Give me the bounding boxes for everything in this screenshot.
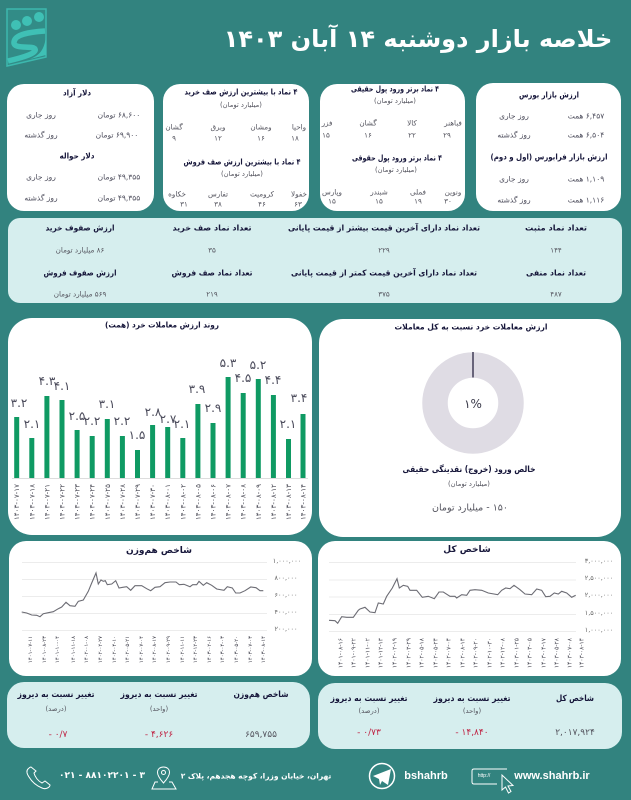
x axis labels (28, 636, 267, 663)
panel: top queue symbols: واحیا (292, 122, 306, 132)
title: خلاصه بازار دوشنبه ۱۴ آبان ۱۴۰۳ (224, 24, 612, 53)
bar chart: ۱۴۰۳-۰۷-۲۸ (118, 484, 127, 520)
panel: equal weight index summary (7, 682, 310, 748)
y axis labels: ۴۰۰,۰۰۰ (274, 608, 298, 616)
panel: symbol counts table: ارزش صفوف خرید (46, 224, 115, 234)
panel: equal weight index summary: (درصد) (46, 705, 67, 713)
bar chart: ۳.۹ (189, 382, 205, 396)
bar chart: ۱۴۰۳-۰۷-۲۳ (73, 484, 82, 520)
panel: top money inflow symbols: فملی (410, 188, 426, 196)
panel: top queue symbols: ۱۶ (257, 134, 265, 142)
bar chart: ۴.۱ (54, 379, 70, 393)
chart title: شاخص هم‌وزن (126, 546, 192, 556)
panel: total index summary: (درصد) (359, 707, 380, 715)
panel: symbol counts table: ۳۷۵ (378, 290, 390, 298)
bar chart: ۱۴۰۳-۰۸-۰۹ (254, 484, 263, 520)
x axis labels: ۱۴۰۳-۰۷-۰۳ (248, 636, 254, 663)
panel: total index summary: (واحد) (463, 707, 481, 715)
y axis labels: ۱,۰۰۰,۰۰۰ (273, 557, 301, 565)
x axis labels: ۱۴۰۳-۰۱-۲۵ (514, 638, 520, 668)
panel: dollar rates: ۶۹,۹۰۰ تومان (96, 130, 138, 140)
bar chart: ۱۴۰۳-۰۸-۰۲ (178, 484, 187, 520)
panel: equal weight index summary: تغییر نسبت به دیروز (120, 690, 198, 700)
panel: top money inflow symbols: ۲۲ (408, 130, 416, 140)
x axis labels: ۱۴۰۲-۰۸-۱۴ (460, 638, 466, 668)
panel: symbol counts table: تعداد نماد صف فروش (172, 268, 252, 278)
x axis labels: ۱۴۰۲-۰۱-۰۸ (84, 636, 90, 663)
panel: top queue symbols: ۹ (172, 134, 176, 142)
bar chart: ۳.۴ (291, 391, 307, 405)
panel: symbol counts table: ۵۶۹ میلیارد تومان (54, 290, 106, 298)
panel: top queue symbols: تفارس (208, 190, 228, 198)
panel: top queue symbols: ۳۱ (180, 200, 188, 208)
y axis labels: ۸۰۰,۰۰۰ (274, 574, 298, 582)
panel: top queue symbols: ۴۶ (258, 200, 266, 208)
panel: top queue symbols: ۱۸ (291, 134, 299, 142)
y axis labels: ۶۰۰,۰۰۰ (274, 591, 298, 599)
x axis labels: ۱۴۰۳-۰۷-۰۸ (566, 637, 574, 668)
panel: top money inflow symbols: کالا (407, 118, 417, 128)
panel: top queue symbols: ۴ نماد با بیشترین ارزش صف خرید (184, 88, 298, 98)
bar chart: ۲.۸ (145, 405, 162, 419)
panel: total index summary (318, 683, 622, 749)
panel: symbol counts table: تعداد نماد منفی (526, 268, 586, 278)
panel: total index summary: - ۱۴,۸۴۰ (455, 728, 489, 738)
bar chart: ۱۴۰۳-۰۸-۰۸ (239, 484, 248, 520)
chart title: شاخص کل (443, 545, 491, 555)
panel: symbol counts table: ۱۴۴ (550, 246, 562, 254)
liquidity net flow: خالص ورود (خروج) نقدینگی حقیقی (402, 464, 536, 475)
panel: top queue symbols: ۶۳ (294, 200, 302, 208)
y axis labels: ۲۰۰,۰۰۰ (274, 625, 298, 633)
x axis labels: ۱۴۰۲-۱۰-۳۰ (486, 638, 494, 668)
y axis labels (273, 557, 301, 633)
x axis labels: ۱۴۰۱-۱۱-۰۲ (364, 638, 372, 668)
icon: map pin (152, 767, 176, 789)
x axis labels: ۱۴۰۲-۱۲-۰۸ (500, 637, 506, 668)
bar chart: ۱۴۰۳-۰۷-۲۹ (133, 484, 142, 520)
x axis labels: ۱۴۰۳-۰۳-۰۵ (526, 638, 534, 668)
panel: market value: ۶,۵۰۴ همت (568, 130, 604, 140)
x axis labels: ۱۴۰۲-۱۲-۲۳ (193, 636, 199, 663)
y axis labels: ۱,۵۰۰,۰۰۰ (585, 609, 613, 617)
line chart: equal weight index (22, 573, 263, 617)
bar chart: ۱۴۰۳-۰۸-۱۴ (298, 484, 308, 520)
panel: market value: ارزش بازار فرابورس (اول و دوم) (490, 152, 608, 162)
bar chart: ۲.۱ (24, 417, 40, 431)
panel: top queue symbols: کرومیت (250, 190, 275, 198)
donut chart: ۱% (464, 397, 482, 411)
panel: dollar rates: روز گذشته (24, 130, 58, 140)
x axis labels: ۱۴۰۲-۰۴-۱۰ (112, 636, 118, 663)
panel: top money inflow symbols: ۱۶ (364, 130, 372, 140)
x axis labels: ۱۴۰۱-۰۸-۲۳ (42, 636, 48, 663)
panel: top money inflow symbols: ۴ نماد برتر ورود پول حقوقی (352, 154, 442, 162)
panel: symbol counts table: تعداد نماد مثبت (525, 224, 587, 232)
panel: symbol counts table: ۲۱۹ (206, 290, 218, 298)
x axis labels: ۱۴۰۱-۰۹-۲۲ (350, 638, 358, 668)
bar chart: ۱۴۰۳-۰۸-۰۷ (224, 484, 233, 520)
x axis labels: ۱۴۰۳-۰۲-۱۶ (207, 636, 213, 663)
panel: symbol counts table: تعداد نماد دارای آخرین قیمت بیشتر از قیمت پایانی (288, 222, 480, 232)
x axis labels: ۱۴۰۲-۰۲-۱۹ (392, 638, 398, 668)
bar chart: ۱۴۰۳-۰۷-۲۱ (42, 484, 51, 520)
panel: top money inflow symbols: شبندر (369, 188, 388, 196)
panel: total index summary: - ۰/۷۳ (357, 728, 381, 738)
bar chart: ۱۴۰۳-۰۸-۰۵ (193, 484, 202, 520)
panel: top money inflow symbols: ۱۵ (322, 130, 330, 140)
panel: equal weight index chart (9, 541, 312, 676)
y axis labels: ۲,۵۰۰,۰۰۰ (585, 574, 613, 582)
panel: top money inflow symbols: ۴ نماد برتر ورود پول حقیقی (351, 84, 439, 94)
bar chart: ۲.۱ (174, 417, 190, 431)
panel: dollar rates: روز جاری (26, 172, 56, 182)
telegram handle: bshahrb (404, 770, 448, 782)
bar chart: ۱۴۰۳-۰۸-۰۶ (208, 484, 218, 520)
panel: symbol counts table: ۲۲۹ (378, 246, 390, 254)
panel: equal weight index summary: تغییر نسبت به دیروز (17, 690, 94, 700)
panel: dollar rates: دلار آزاد (63, 88, 91, 98)
bar chart: ۲.۷ (160, 412, 177, 426)
panel: dollar rates: ۴۹,۳۵۵ تومان (98, 194, 140, 202)
panel: total index summary: شاخص کل (556, 694, 594, 704)
panel: equal weight index summary: شاخص هم‌وزن (234, 690, 288, 700)
panel: market value: ارزش بازار بورس (519, 90, 579, 100)
bar chart: ۵.۲ (250, 358, 266, 372)
bar chart: ۳.۲ (11, 396, 27, 410)
panel: total index summary: تغییر نسبت به دیروز (330, 694, 408, 704)
panel: dollar rates: ۴۹,۳۵۵ تومان (98, 172, 140, 182)
panel: dollar rates: دلار حواله (60, 152, 94, 160)
panel: top money inflow symbols: فزر (321, 118, 332, 128)
panel: market value: ۶,۴۵۷ همت (568, 112, 604, 120)
panel: top money inflow symbols: فباهنر (443, 118, 462, 128)
liquidity net flow: (میلیارد تومان) (448, 480, 490, 488)
panel: top queue symbols: (میلیارد تومان) (221, 170, 263, 178)
panel: market value: روز جاری (499, 174, 529, 184)
panel: top money inflow symbols: ونوین (445, 188, 461, 196)
panel: top queue symbols: ۴ نماد با بیشترین ارزش صف فروش (184, 158, 301, 168)
x axis labels: ۱۴۰۲-۰۲-۲۷ (98, 636, 104, 663)
panel: top queue symbols: ۳۸ (214, 200, 222, 208)
x axis labels: ۱۴۰۳-۰۵-۲۸ (554, 637, 560, 668)
bar chart: ۴.۴ (265, 373, 281, 387)
bar chart: ۲.۱ (280, 417, 296, 431)
x axis labels: ۱۴۰۳-۰۴-۰۳ (220, 636, 226, 663)
panel: equal weight index summary: (واحد) (150, 705, 168, 713)
panel: top queue symbols: (میلیارد تومان) (220, 101, 262, 109)
panel: top queue symbols: خفولا (291, 190, 307, 198)
x axis labels: ۱۴۰۲-۰۹-۲۰ (472, 638, 480, 668)
panel: symbol counts table: ۳۵ (208, 246, 216, 254)
bar chart: ۵.۳ (220, 356, 237, 370)
bar chart: ۲.۲ (84, 414, 100, 428)
y axis labels: ۳,۰۰۰,۰۰۰ (585, 557, 613, 565)
bar chart: ۱۴۰۳-۰۸-۱۳ (284, 484, 293, 520)
panel: top queue symbols: ومشان (250, 122, 272, 132)
panel: total index summary: ۲,۰۱۷,۹۲۴ (555, 728, 595, 738)
bar chart: ۱۴۰۳-۰۷-۲۴ (88, 484, 97, 520)
donut chart (435, 352, 511, 441)
x axis labels: ۱۴۰۲-۰۷-۰۴ (446, 638, 452, 668)
bar chart: ۲.۲ (114, 414, 130, 428)
bar chart: ۴.۵ (235, 371, 251, 385)
x axis labels: ۱۴۰۲-۱۱-۱۱ (180, 636, 186, 663)
x axis labels: ۱۴۰۱-۱۱-۱۸ (71, 636, 77, 663)
icon: telegram (370, 764, 394, 788)
bar chart: ۴.۳ (39, 374, 56, 388)
x axis labels: ۱۴۰۱-۰۷-۱۱ (28, 636, 34, 663)
x axis labels: ۱۴۰۳-۰۴-۱۷ (540, 637, 548, 668)
panel: top money inflow symbols: ۱۹ (414, 196, 422, 206)
x axis labels: ۱۴۰۳-۰۸-۱۴ (261, 636, 267, 663)
bar chart: ۱۴۰۳-۰۸-۰۱ (163, 484, 172, 520)
panel: market value (476, 83, 621, 211)
panel: equal weight index summary: - ۰/۷ (49, 730, 68, 740)
x axis labels (338, 637, 586, 668)
panel: top money inflow symbols: ۲۹ (443, 130, 451, 140)
panel: symbol counts table: ۸۶ میلیارد تومان (56, 246, 105, 254)
x axis labels: ۱۴۰۲-۰۵-۲۴ (432, 638, 440, 668)
panel: dollar rates (7, 84, 154, 211)
bar chart: ۱۴۰۳-۰۷-۱۸ (27, 484, 36, 520)
panel: top queue symbols (163, 84, 309, 211)
panel: total index chart (318, 541, 621, 676)
panel: dollar rates: ۶۸,۶۰۰ تومان (98, 110, 140, 120)
x axis labels: ۱۴۰۱-۱۰-۰۴ (55, 636, 61, 663)
website: www.shahrb.ir (513, 770, 590, 782)
panel: symbol counts table: ارزش صفوف فروش (44, 268, 117, 278)
panel: market value: روز جاری (499, 112, 529, 120)
bar chart (11, 356, 308, 520)
liquidity net flow: ۱۵۰ - میلیارد تومان (432, 502, 508, 514)
bar chart: ۱۴۰۳-۰۷-۲۲ (58, 484, 66, 520)
x axis labels: ۱۴۰۲-۰۸-۱۷ (152, 636, 158, 663)
donut title: ارزش معاملات خرد نسبت به کل معاملات (394, 322, 548, 332)
line chart: total index (329, 579, 576, 623)
panel: dollar rates: روز جاری (26, 110, 56, 120)
panel: market value: ۱,۱۱۶ همت (568, 196, 604, 204)
panel: retail share donut (319, 319, 621, 537)
panel: top money inflow symbols: گشان (359, 118, 377, 128)
panel: symbol counts table: ۴۸۷ (550, 290, 562, 298)
y axis labels: ۱,۰۰۰,۰۰۰ (585, 626, 613, 634)
panel: top queue symbols: ۱۲ (214, 134, 222, 142)
panel: symbol counts table: تعداد نماد صف خرید (172, 224, 252, 232)
chart title: روند ارزش معاملات خرد (همت) (105, 320, 219, 330)
panel: top queue symbols: خکاوه (168, 190, 186, 198)
panel: market value: روز گذشته (497, 130, 531, 140)
icon: browser cursor (472, 769, 513, 793)
phone number: ۰۲۱ - ۸۸۱۰۲۲۰۱ - ۳ (59, 771, 145, 781)
bar chart: ۲.۹ (205, 401, 221, 415)
panel: symbol counts table: تعداد نماد دارای آخرین قیمت کمتر از قیمت پایانی (291, 268, 477, 278)
address: تهران، خیابان وزرا، کوچه هجدهم، پلاک ۲ (181, 772, 331, 780)
panel: top money inflow symbols: (میلیارد تومان) (375, 166, 417, 174)
panel: market value: روز گذشته (497, 196, 531, 204)
panel: top queue symbols: وبرق (210, 122, 226, 132)
panel: equal weight index summary: - ۴,۶۲۶ (145, 730, 173, 740)
panel: top queue symbols: گشان (165, 122, 183, 132)
panel: dollar rates: روز گذشته (24, 194, 58, 202)
x axis labels: ۱۴۰۱-۱۲-۱۳ (378, 637, 384, 668)
panel: top money inflow symbols (320, 84, 465, 211)
logo (7, 9, 46, 66)
icon: browser cursor: http:// (478, 773, 491, 779)
x axis labels: ۱۴۰۲-۰۵-۲۱ (125, 636, 131, 663)
icon: phone (27, 767, 50, 789)
x axis labels: ۱۴۰۲-۰۵-۱۸ (418, 637, 426, 668)
x axis labels: ۱۴۰۳-۰۸-۱۴ (578, 638, 586, 668)
panel: total index summary: تغییر نسبت به دیروز (433, 694, 510, 704)
bar chart: ۲.۵ (69, 409, 85, 423)
panel: market value: ۱,۱۰۹ همت (568, 174, 604, 184)
panel: retail trade value bar chart (8, 318, 312, 535)
panel: top money inflow symbols: وپارس (322, 188, 342, 196)
liquidity net flow (402, 464, 536, 514)
bar chart: ۱۴۰۳-۰۷-۲۵ (103, 484, 112, 520)
y axis labels: ۲,۰۰۰,۰۰۰ (585, 591, 613, 599)
panel: top money inflow symbols: (میلیارد تومان) (374, 97, 416, 105)
panel: top money inflow symbols: ۱۵ (328, 196, 336, 206)
footer (27, 764, 590, 793)
x axis labels: ۱۴۰۲-۰۳-۲۹ (406, 638, 412, 668)
x axis labels: ۱۴۰۲-۰۹-۲۹ (166, 636, 172, 663)
bar chart: ۱.۵ (129, 428, 145, 442)
bar chart: ۱۴۰۳-۰۷-۳۰ (148, 484, 157, 520)
panel: equal weight index summary: ۶۵۹,۷۵۵ (245, 730, 277, 740)
bar chart: ۱۴۰۳-۰۸-۱۲ (269, 484, 278, 520)
y axis labels (585, 557, 613, 634)
panel: top money inflow symbols: ۳۰ (444, 196, 452, 206)
bar chart: ۱۴۰۳-۰۷-۱۷ (12, 484, 21, 520)
bar chart: ۳.۱ (99, 397, 115, 411)
x axis labels: ۱۴۰۱-۰۸-۱۶ (338, 638, 344, 668)
x axis labels: ۱۴۰۲-۰۷-۰۴ (139, 636, 145, 663)
x axis labels: ۱۴۰۳-۰۵-۲۰ (234, 636, 240, 663)
panel: top money inflow symbols: ۱۵ (375, 196, 383, 206)
panel: symbol counts table (8, 218, 622, 303)
